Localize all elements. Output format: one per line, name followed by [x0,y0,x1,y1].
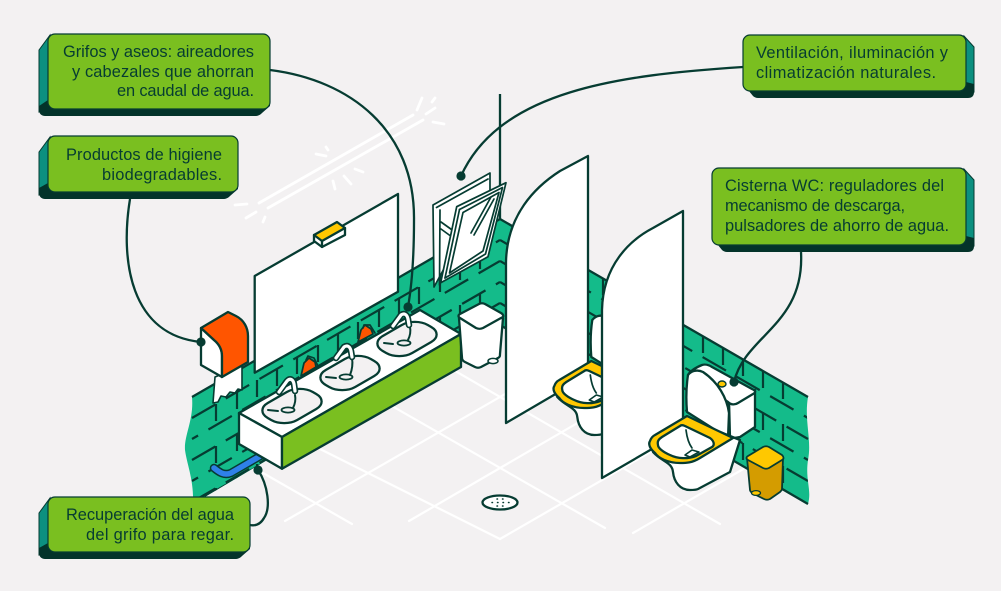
connector: ventilation [456,67,743,181]
cubicle door 1 [506,156,588,423]
back toilet [554,316,644,435]
callout: hygiene products: Productos de higiene [66,146,222,164]
callout: ventilation: Ventilación, iluminación y [756,44,949,62]
callout: hygiene products: biodegradables. [102,166,222,184]
blue greywater pipe [214,455,262,474]
callout: taps: en caudal de agua. [117,82,254,100]
callout: hygiene products [39,136,238,199]
cubicle door 2 [602,211,683,478]
callout: cistern: Cisterna WC: reguladores del [725,177,944,195]
mirror [255,194,398,373]
callout: cistern: pulsadores de ahorro de agua. [725,217,949,235]
callout: cistern: mecanismo de descarga, [725,197,905,215]
callout: water recovery: Recuperación del agua [66,506,235,524]
callout: taps: Grifos y aseos: aireadores [63,43,254,61]
paper towel dispenser [201,312,248,377]
callout: water recovery [39,497,250,559]
sunlight glints [235,98,444,222]
washbasin counter [239,310,461,469]
left tiled wall [185,219,500,504]
vertical wall corner line [499,94,501,330]
connector: taps [270,70,414,312]
mirror lamp [314,222,345,247]
soap dispensers [301,325,375,376]
callout: taps [39,34,270,116]
connector: water recovery [250,465,268,525]
white pedal bin [458,303,503,368]
callout: taps: y cabezales que ahorran [72,63,254,81]
basin 1 with tap [255,379,329,428]
paper towel sheet [213,366,242,403]
right tiled wall [500,219,809,504]
callout: ventilation: climatización naturales. [756,64,936,82]
callout: water recovery: del grifo para regar. [86,526,234,544]
floor tile grid [263,345,745,539]
front toilet with cistern [649,365,755,490]
callout: cistern [712,168,974,252]
yellow pedal bin [746,446,784,500]
window [433,173,506,287]
connector: cistern [729,252,801,387]
connector: hygiene products [127,199,206,347]
callout: ventilation [743,35,974,98]
basin 3 with tap [370,314,444,360]
floor drain [482,496,518,510]
basin 2 with tap [313,346,387,394]
